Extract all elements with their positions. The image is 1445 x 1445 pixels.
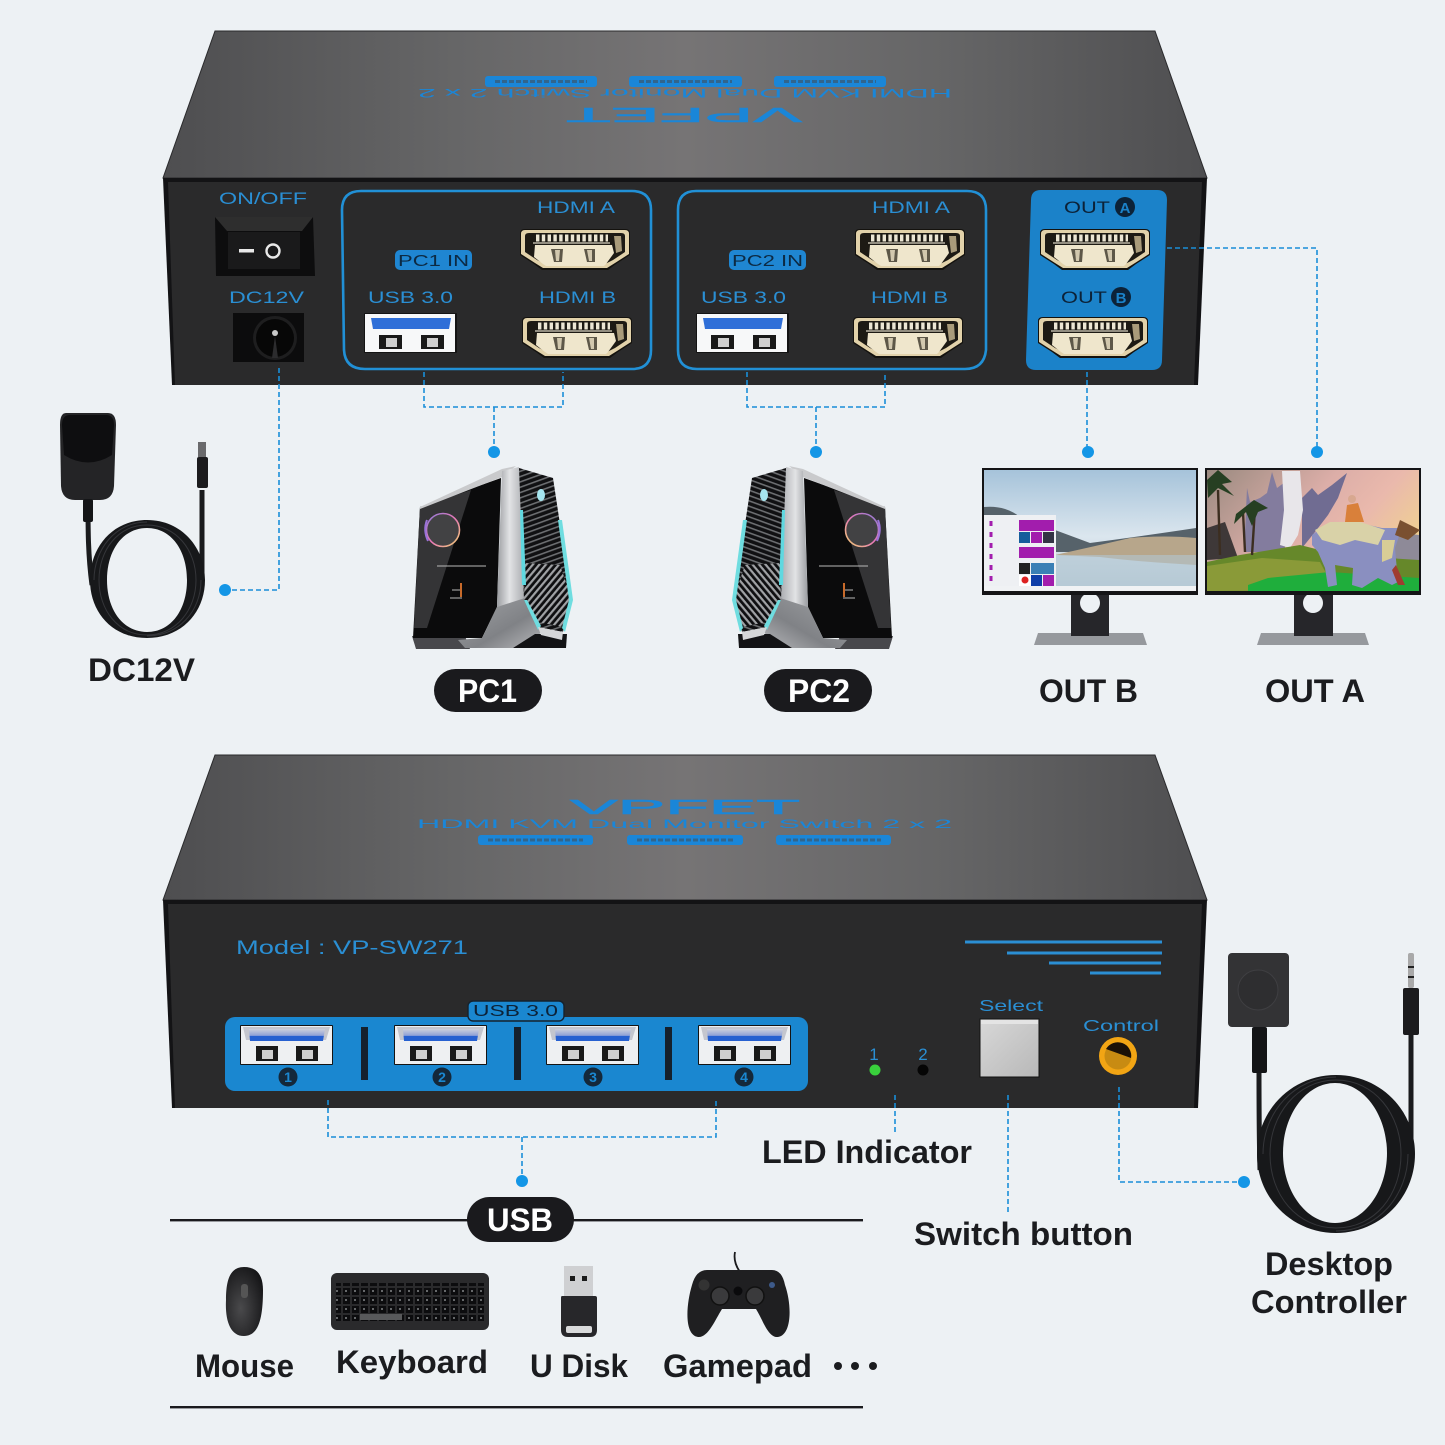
device top face with mirrored print	[163, 31, 1207, 178]
control port: Control	[1083, 1018, 1159, 1035]
panel: outputs: B	[1116, 290, 1127, 307]
power switch with label: ON/OFF	[219, 189, 307, 208]
label: Desktop Controller: Desktop	[1265, 1246, 1393, 1282]
device rear panel	[163, 178, 1207, 385]
icon: keyboard	[331, 1273, 489, 1330]
panel: PC2 inputs: PC2 IN	[732, 253, 803, 270]
decorative speed lines	[965, 942, 1162, 973]
panel: PC1 inputs: HDMI B	[539, 288, 616, 307]
label: PC2: PC2	[788, 673, 850, 709]
label: Switch button: Switch button	[914, 1216, 1133, 1252]
label: PC1	[434, 669, 542, 712]
device top face with print	[163, 755, 1207, 900]
LED indicators	[869, 1045, 928, 1076]
panel: outputs: A	[1120, 200, 1131, 217]
LED indicators: 2	[918, 1045, 928, 1064]
device top face with mirrored print: HDMI KVM Dual Monitor Switch 2 x 2	[417, 86, 952, 100]
power switch with label	[215, 189, 315, 276]
icon: U disk	[561, 1266, 597, 1337]
USB devices section header: USB	[487, 1202, 553, 1238]
label: Keyboard: Keyboard	[336, 1344, 488, 1380]
icon: power adapter	[60, 413, 208, 638]
model label: Model : VP-SW271	[236, 938, 468, 959]
label: DC12V: DC12V	[88, 652, 196, 688]
icon: gamepad	[687, 1252, 790, 1337]
panel: PC2 inputs: HDMI A	[872, 198, 951, 217]
device top face with print: HDMI KVM Dual Monitor Switch 2 x 2	[417, 817, 953, 831]
panel: outputs	[1026, 190, 1167, 370]
panel: PC1 inputs: USB 3.0	[368, 288, 453, 307]
panel: PC2 inputs: HDMI B	[871, 288, 948, 307]
icon: mouse	[226, 1267, 263, 1336]
label: OUT B: OUT B	[1039, 673, 1138, 709]
label: U Disk: U Disk	[530, 1348, 628, 1384]
label: Gamepad: Gamepad	[663, 1348, 812, 1384]
panel: USB 3.0 ports	[225, 1001, 808, 1091]
panel: outputs: OUT	[1061, 288, 1107, 307]
DC power jack with label: DC12V	[229, 288, 305, 307]
panel: USB 3.0 ports: 1	[284, 1069, 292, 1085]
control port	[1083, 1018, 1159, 1075]
connector lines: rear view	[219, 248, 1323, 596]
icon: PC1 tower	[412, 466, 573, 649]
rear view KVM device	[163, 31, 1207, 385]
device top face with print: VPFET	[570, 797, 800, 819]
panel: PC1 inputs: HDMI A	[537, 198, 616, 217]
panel: USB 3.0 ports: USB 3.0	[473, 1003, 558, 1020]
panel: USB 3.0 ports: 2	[438, 1069, 446, 1085]
device top face with mirrored print: VPFET	[566, 103, 802, 125]
label: PC2	[764, 669, 872, 712]
icon: desktop controller	[1228, 953, 1419, 1233]
ellipsis dots	[834, 1362, 877, 1370]
icon: PC2 tower	[732, 466, 893, 649]
select button: Select	[979, 998, 1044, 1015]
label: Desktop Controller	[1251, 1246, 1407, 1320]
front view KVM device	[163, 755, 1207, 1108]
panel: USB 3.0 ports: 3	[589, 1069, 597, 1085]
panel: outputs: OUT	[1064, 198, 1110, 217]
connector lines: front view	[328, 1087, 1250, 1212]
DC power jack with label	[229, 288, 305, 362]
select button	[979, 998, 1044, 1077]
label: OUT A: OUT A	[1265, 673, 1365, 709]
icon: monitor OUT A	[1205, 468, 1421, 645]
panel: PC1 inputs: PC1 IN	[398, 253, 469, 270]
panel: PC1 inputs	[342, 191, 651, 369]
device front panel	[163, 900, 1207, 1108]
icon: monitor OUT B	[982, 468, 1198, 645]
USB devices section header	[170, 1197, 863, 1242]
panel: PC2 inputs: USB 3.0	[701, 288, 786, 307]
label: Mouse: Mouse	[195, 1348, 294, 1384]
panel: PC2 inputs	[678, 191, 986, 369]
LED indicators: 1	[869, 1045, 879, 1064]
label: LED Indicator: LED Indicator	[762, 1134, 972, 1170]
label: Desktop Controller: Controller	[1251, 1284, 1407, 1320]
panel: USB 3.0 ports: 4	[740, 1069, 748, 1085]
label: PC1: PC1	[458, 673, 517, 709]
